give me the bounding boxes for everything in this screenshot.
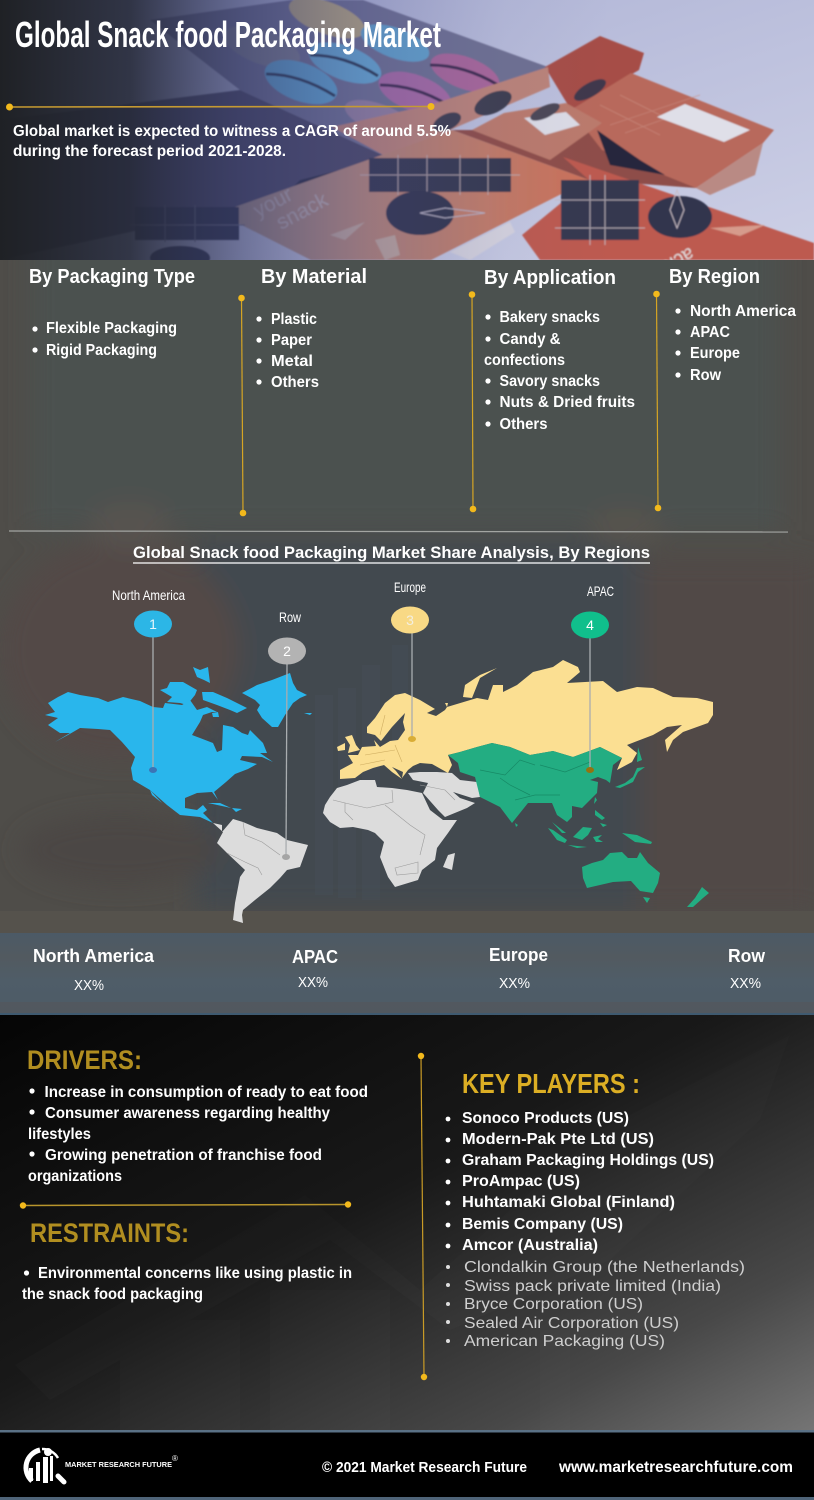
panel: drivers: organizations	[28, 1168, 122, 1185]
divider: drivers and restraints gold line	[20, 1201, 351, 1209]
panel: key players: Sonoco Products (US)	[462, 1110, 629, 1127]
map pin: Europe	[391, 579, 429, 742]
panel: header photo of snack boxes: your	[250, 183, 296, 222]
panel: By Region: Europe	[690, 345, 740, 362]
panel: drivers: Growing penetration of franchise food	[45, 1147, 322, 1164]
panel: key players: Huhtamaki Global (Finland)	[462, 1194, 675, 1211]
panel: restraints: RESTRAINTS:	[30, 1218, 189, 1248]
panel: By Application: Others	[500, 416, 548, 433]
panel: By Packaging Type: By Packaging Type	[29, 266, 195, 288]
panel: key players: Bryce Corporation (US)	[464, 1296, 643, 1313]
panel: restraints: Environmental concerns like using plastic in	[38, 1265, 352, 1282]
panel: By Material	[256, 266, 367, 391]
panel: drivers	[27, 1045, 368, 1185]
panel: dark drivers and players background	[0, 1015, 814, 1432]
panel: key players: Clondalkin Group (the Netherlands)	[464, 1259, 745, 1276]
divider: gold column separators	[238, 291, 661, 516]
panel: By Material: Others	[271, 374, 319, 391]
panel: By Material: Plastic	[271, 311, 317, 328]
map pin: Europe: Europe	[394, 579, 426, 595]
panel: header photo of snack boxes: ack	[661, 243, 698, 275]
panel: regional share band: XX%	[499, 975, 530, 992]
panel: regional share band	[0, 933, 814, 1015]
panel: key players: American Packaging (US)	[464, 1333, 665, 1350]
map pin: Row: 2	[283, 643, 291, 659]
map pin: Europe: 3	[406, 612, 414, 628]
map pin: APAC: 4	[586, 617, 594, 633]
panel: footer	[0, 1430, 814, 1500]
panel: By Region: By Region	[669, 266, 760, 288]
panel: regional share band: APAC	[292, 947, 338, 967]
panel: By Packaging Type: Flexible Packaging	[46, 320, 177, 337]
panel: By Region: APAC	[690, 324, 730, 341]
panel: By Packaging Type	[29, 266, 195, 359]
panel: By Region	[669, 266, 796, 384]
panel: key players: Sealed Air Corporation (US)	[464, 1315, 679, 1332]
divider: header gold line	[6, 103, 434, 110]
panel: restraints	[22, 1218, 352, 1303]
panel: footer: www.marketresearchfuture.com	[558, 1459, 793, 1476]
panel: drivers: lifestyles	[28, 1126, 91, 1143]
panel: regional share band: XX%	[730, 975, 761, 992]
panel: By Region: North America	[690, 303, 796, 320]
map pin: Row: Row	[279, 609, 302, 625]
text block: CAGR statement	[13, 123, 451, 160]
panel: key players: Bemis Company (US)	[462, 1216, 623, 1233]
panel: blurred segmentation and map background	[0, 230, 814, 933]
panel: key players: Amcor (Australia)	[462, 1237, 598, 1254]
map pin: North America	[112, 587, 185, 773]
panel: drivers: Increase in consumption of ready to eat food	[44, 1084, 368, 1101]
panel: By Region: Row	[690, 367, 722, 384]
panel: By Material: Metal	[271, 353, 313, 370]
panel: By Application: Savory snacks	[500, 373, 600, 390]
panel: By Application: By Application	[484, 267, 616, 289]
panel: regional share band: XX%	[74, 977, 104, 994]
panel: By Application: Candy &	[500, 331, 560, 348]
title: Global Snack food Packaging Market	[15, 14, 441, 55]
panel: By Material: By Material	[261, 266, 367, 288]
panel: header photo of snack boxes: snack	[273, 188, 332, 234]
map pin: Row	[268, 609, 306, 860]
map region: Row	[213, 772, 480, 923]
panel: regional share band: Europe	[489, 945, 548, 965]
panel: By Application: confections	[484, 352, 565, 369]
divider: key players gold line	[418, 1053, 427, 1380]
map region: APAC	[448, 743, 709, 907]
icon: market research future logo	[26, 1448, 64, 1483]
map region: Europe and Russia	[337, 660, 713, 779]
text block: CAGR statement: during the forecast period 2021-2028.	[13, 143, 286, 160]
panel: By Material: Paper	[271, 332, 312, 349]
panel: key players	[446, 1068, 745, 1350]
heading: market share analysis: Global Snack food Packaging Market Share Analysis, By Regions	[133, 543, 650, 562]
panel: By Application: Nuts & Dried fruits	[500, 394, 635, 411]
map region: North America	[45, 667, 312, 823]
map pin: APAC: APAC	[587, 583, 614, 599]
panel: regional share band: XX%	[298, 974, 328, 991]
panel: By Application	[484, 267, 635, 433]
panel: restraints: the snack food packaging	[22, 1286, 203, 1303]
map pin: North America: 1	[149, 616, 157, 632]
panel: By Packaging Type: Rigid Packaging	[46, 342, 157, 359]
panel: key players: Modern-Pak Pte Ltd (US)	[462, 1131, 654, 1148]
map pin: North America: North America	[112, 587, 185, 603]
panel: regional share band: North America	[33, 946, 155, 966]
panel: key players: ProAmpac (US)	[462, 1173, 580, 1190]
panel: footer: © 2021 Market Research Future	[322, 1459, 527, 1476]
panel: drivers: Consumer awareness regarding healthy	[45, 1105, 330, 1122]
panel: drivers: DRIVERS:	[27, 1045, 142, 1075]
panel: footer: MARKET RESEARCH FUTURE	[65, 1460, 172, 1469]
panel: regional share band: Row	[728, 946, 766, 966]
panel: key players: KEY PLAYERS :	[462, 1068, 640, 1099]
text block: CAGR statement: Global market is expected to witness a CAGR of around 5.5%	[13, 123, 451, 140]
map pin: APAC	[571, 583, 614, 773]
panel: By Application: Bakery snacks	[500, 309, 600, 326]
panel: footer: ®	[172, 1454, 178, 1463]
panel: key players: Swiss pack private limited (India)	[464, 1278, 721, 1295]
panel: key players: Graham Packaging Holdings (US)	[462, 1152, 714, 1169]
world map by region	[45, 660, 713, 923]
panel: header photo of snack boxes	[0, 0, 814, 275]
